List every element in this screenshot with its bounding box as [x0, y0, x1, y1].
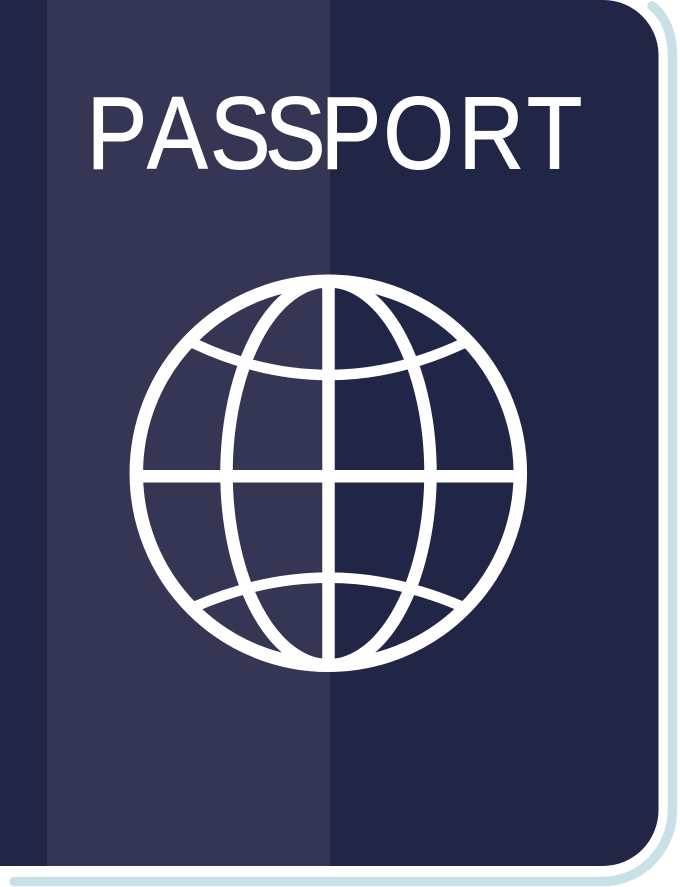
title: PASSPORT: [87, 75, 582, 191]
spine band: [47, 0, 330, 866]
icon: globe: [136, 278, 521, 668]
